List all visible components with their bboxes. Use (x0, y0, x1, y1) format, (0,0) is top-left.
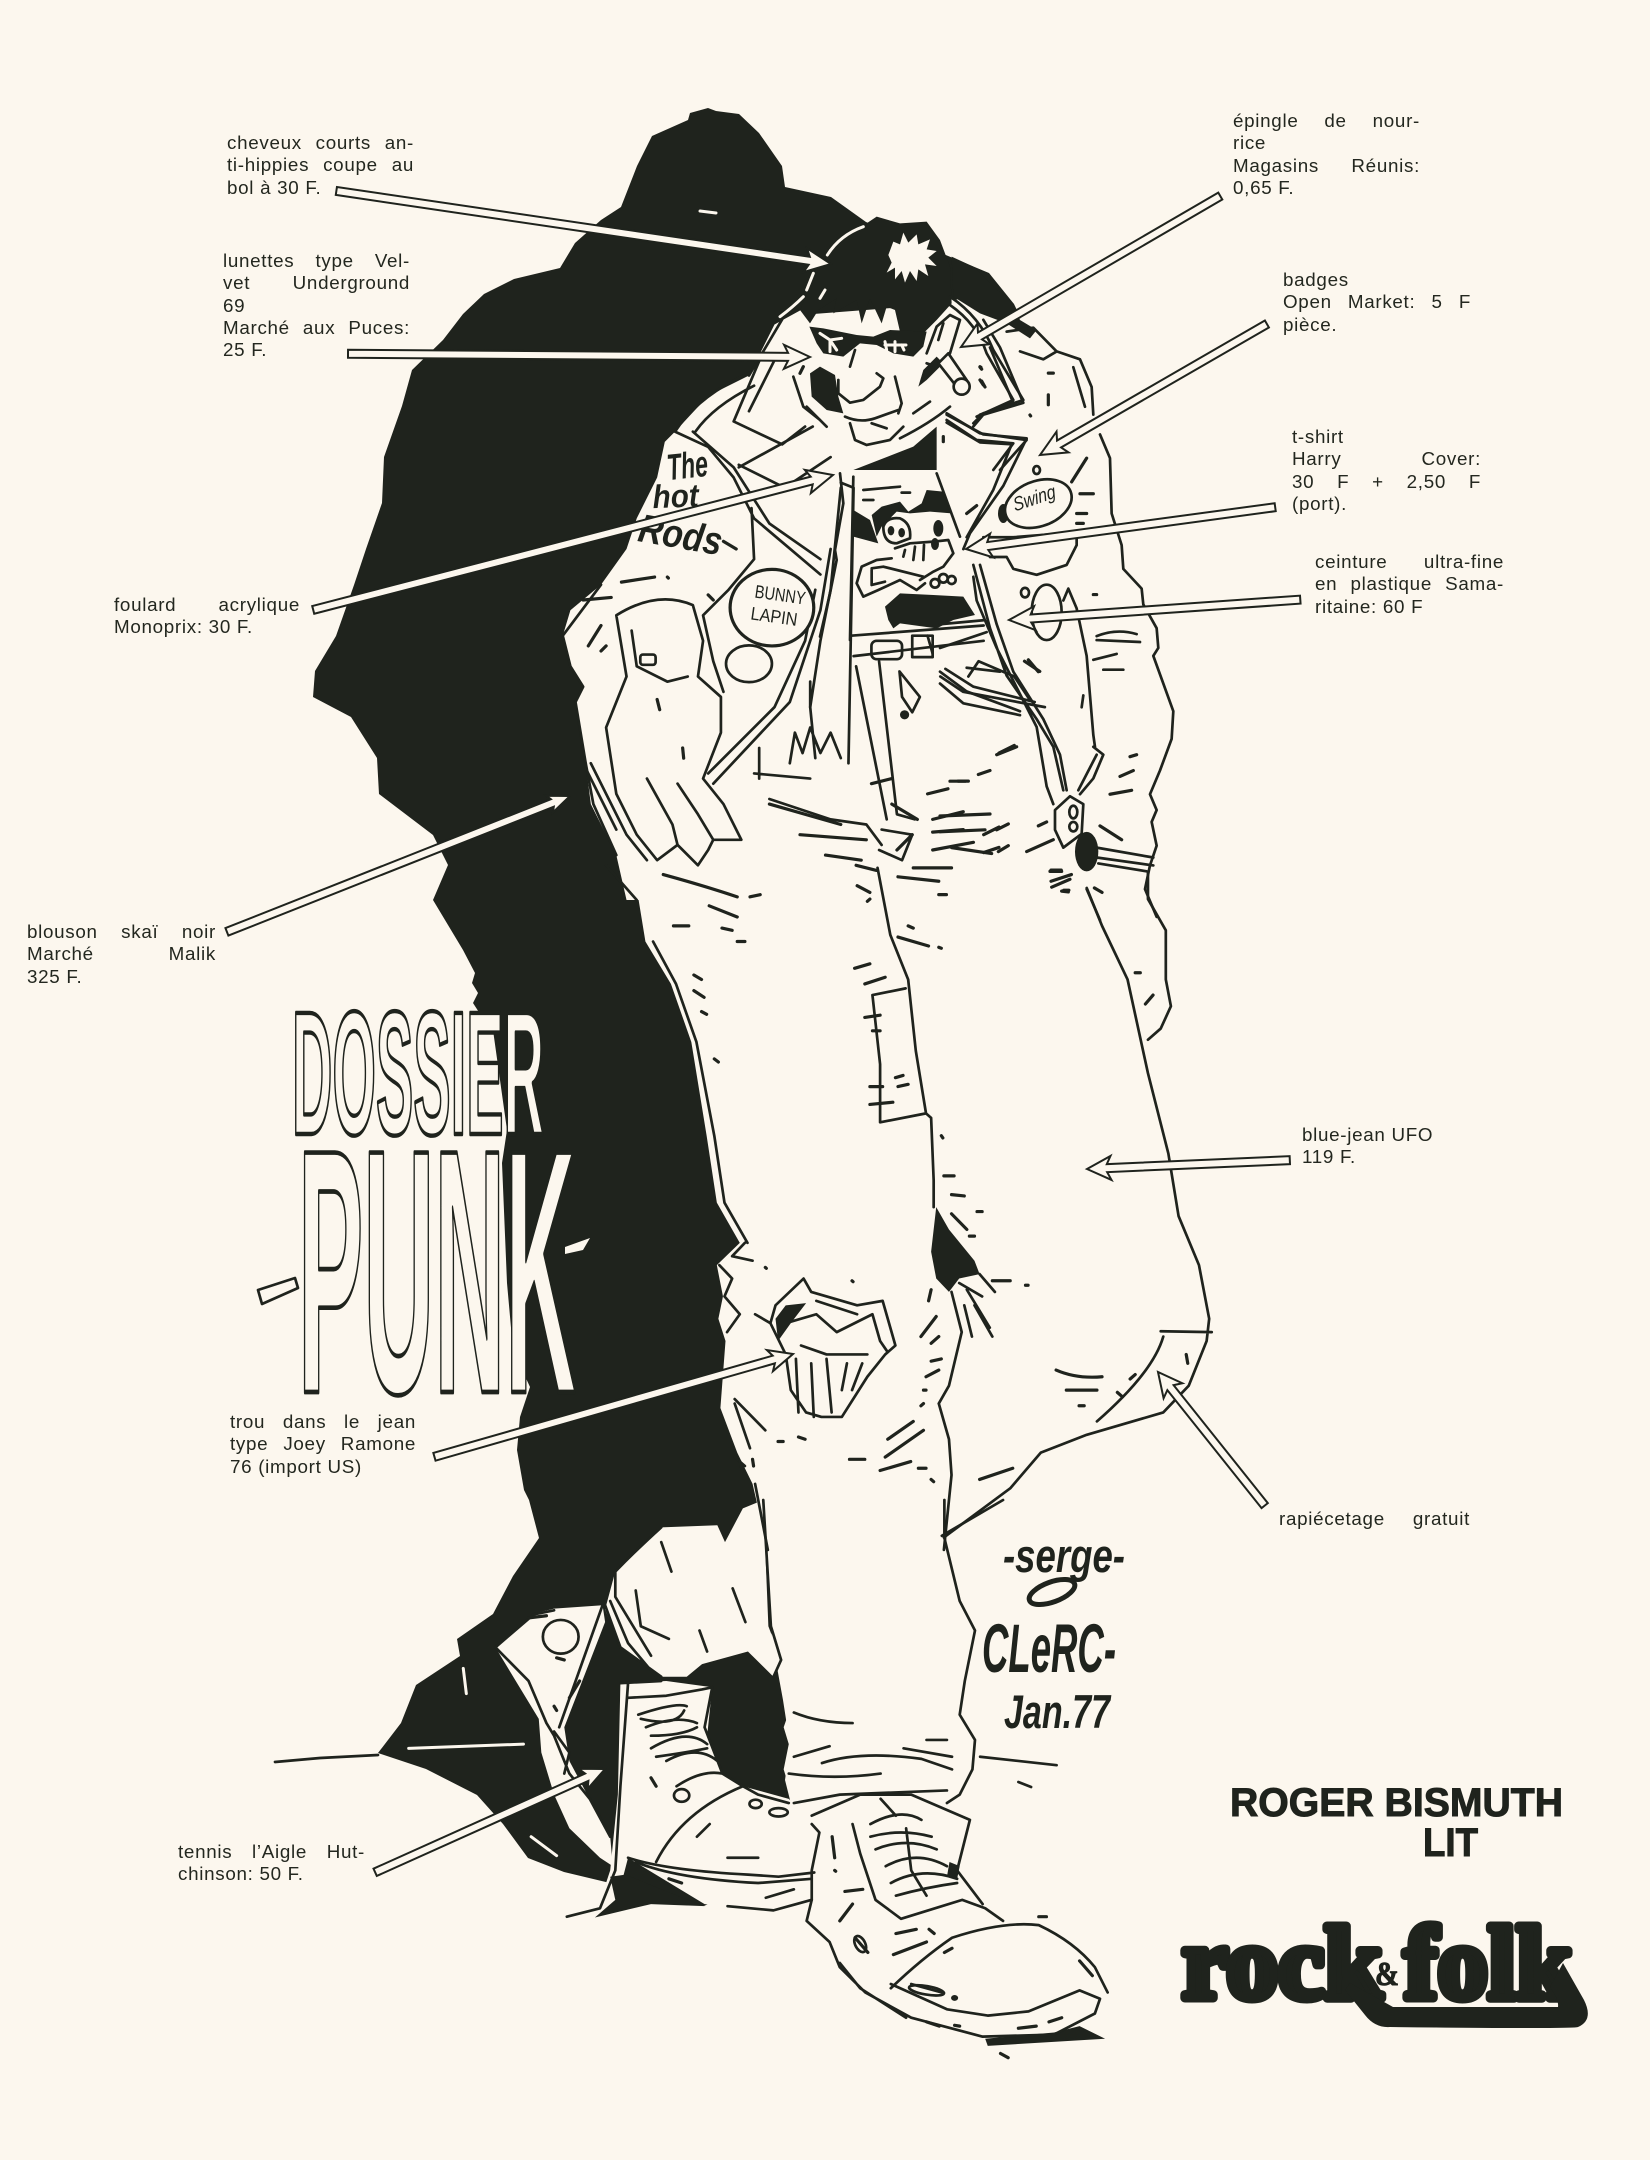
black cast shadow (275, 108, 1024, 1906)
label: epingle: épingle de nour- (1233, 110, 1420, 131)
arrow: lunettes (348, 342, 810, 369)
lettering dashes (258, 1238, 590, 1304)
sleeve lettering (635, 443, 726, 564)
arrow: rapiecetage (1149, 1365, 1274, 1513)
arrow: ceinture (1008, 588, 1301, 632)
label: epingle: Magasins Réunis: (1233, 155, 1420, 176)
label: lunettes: Marché aux Puces: (223, 317, 410, 338)
arrow: t-shirt (964, 495, 1277, 561)
label: t-shirt (1292, 426, 1481, 514)
badge: swing: Swing (1011, 480, 1058, 516)
sleeve lettering: hot (652, 477, 700, 515)
logo: rock&folk: folk (1404, 1906, 1572, 2021)
label: epingle: 0,65 F. (1233, 177, 1294, 198)
arrow: foulard (310, 463, 836, 622)
label: trou dans le jean: 76 (import US) (230, 1456, 362, 1477)
jacket and hand (563, 319, 1045, 900)
label: trou dans le jean: trou dans le jean (230, 1411, 416, 1432)
label: tennis: chinson: 50 F. (178, 1863, 304, 1884)
badge: bunny lapin: LAPIN (749, 603, 799, 630)
label: ceinture (1315, 551, 1504, 617)
label: foulard: Monoprix: 30 F. (114, 616, 253, 637)
arrow: cheveux (335, 179, 833, 276)
label: foulard: foulard acrylique (114, 594, 300, 615)
arrow: trou (431, 1343, 796, 1467)
label: blue-jean: blue-jean UFO (1302, 1124, 1433, 1145)
credit: Roger Bismuth lit (1230, 1781, 1563, 1865)
label: cheveux: ti-hippies coupe au (227, 154, 414, 175)
right jacket side and arm (940, 320, 1173, 920)
arrow: blouson (224, 788, 573, 940)
label: lunettes: 69 (223, 295, 245, 316)
label: blouson: blouson skaï noir (27, 921, 216, 942)
label: tennis (178, 1841, 365, 1884)
head: hair, glasses and face (780, 217, 1037, 470)
label: badges: pièce. (1283, 314, 1337, 335)
label: blouson: 325 F. (27, 966, 82, 987)
lower trousers and knee hole (653, 868, 1212, 1550)
label: blue-jean (1302, 1124, 1433, 1167)
label: badges: badges (1283, 269, 1349, 290)
artist signature: Jan.77 (1004, 1685, 1112, 1738)
artist signature (982, 1529, 1125, 1738)
label: badges (1283, 269, 1471, 335)
logo: rock&folk: rock (1182, 1906, 1382, 2021)
badge: swing (1001, 472, 1076, 536)
boots (409, 1500, 1108, 2058)
credit: Roger Bismuth lit: LIT (1423, 1821, 1478, 1865)
label: lunettes (223, 250, 410, 360)
logo: rock&folk (1182, 1906, 1588, 2028)
label: badges: Open Market: 5 F (1283, 291, 1471, 312)
label: tennis: tennis l’Aigle Hut- (178, 1841, 365, 1862)
label: lunettes: 25 F. (223, 339, 267, 360)
label: foulard (114, 594, 300, 637)
label: t-shirt: 30 F + 2,50 F (1292, 471, 1481, 492)
logo: rock&folk: & (1375, 1956, 1399, 1993)
label: cheveux: bol à 30 F. (227, 177, 321, 198)
label: ceinture: en plastique Sama- (1315, 573, 1504, 594)
label: t-shirt: Harry Cover: (1292, 448, 1481, 469)
belt (851, 626, 984, 659)
label: t-shirt: (port). (1292, 493, 1347, 514)
label: ceinture: ceinture ultra-fine (1315, 551, 1504, 572)
label: rapiecetage: rapiécetage gratuit (1279, 1508, 1470, 1529)
label: lunettes: lunettes type Vel- (223, 250, 410, 271)
figure white body fill (495, 299, 1214, 2046)
knee hole (755, 1279, 895, 1417)
label: epingle (1233, 110, 1420, 198)
label: ceinture: ritaine: 60 F (1315, 596, 1423, 617)
label: trou dans le jean: type Joey Ramone (230, 1433, 416, 1454)
artist signature: -serge- (1003, 1529, 1125, 1582)
arrow: badges (1034, 314, 1273, 465)
label: trou dans le jean (230, 1411, 416, 1477)
hand lettering: Dossier Punk (292, 974, 576, 1466)
t-shirt with cartoon dog (820, 473, 975, 640)
label: blouson: Marché Malik (27, 943, 216, 964)
label: t-shirt: t-shirt (1292, 426, 1344, 447)
credit: Roger Bismuth lit: ROGER BISMUTH (1230, 1781, 1563, 1825)
artist signature: CLeRC- (982, 1611, 1116, 1687)
label: blue-jean: 119 F. (1302, 1146, 1356, 1167)
sleeve lettering: The (665, 443, 710, 488)
hand lettering: Dossier Punk: PUNK (298, 1076, 576, 1466)
label: lunettes: vet Underground (223, 272, 410, 293)
arrow: epingle (955, 186, 1226, 357)
arrow: tennis (371, 1759, 610, 1882)
arrow: blue-jean (1086, 1148, 1290, 1181)
hand lettering: Dossier Punk: DOSSIER (292, 974, 544, 1171)
label: blouson (27, 921, 216, 987)
badge: bunny lapin (730, 569, 814, 646)
label: cheveux (227, 132, 414, 198)
badge: bunny lapin: BUNNY (754, 581, 807, 609)
label: cheveux: cheveux courts an- (227, 132, 414, 153)
sleeve lettering: Rods (635, 506, 726, 564)
label: epingle: rice (1233, 132, 1266, 153)
